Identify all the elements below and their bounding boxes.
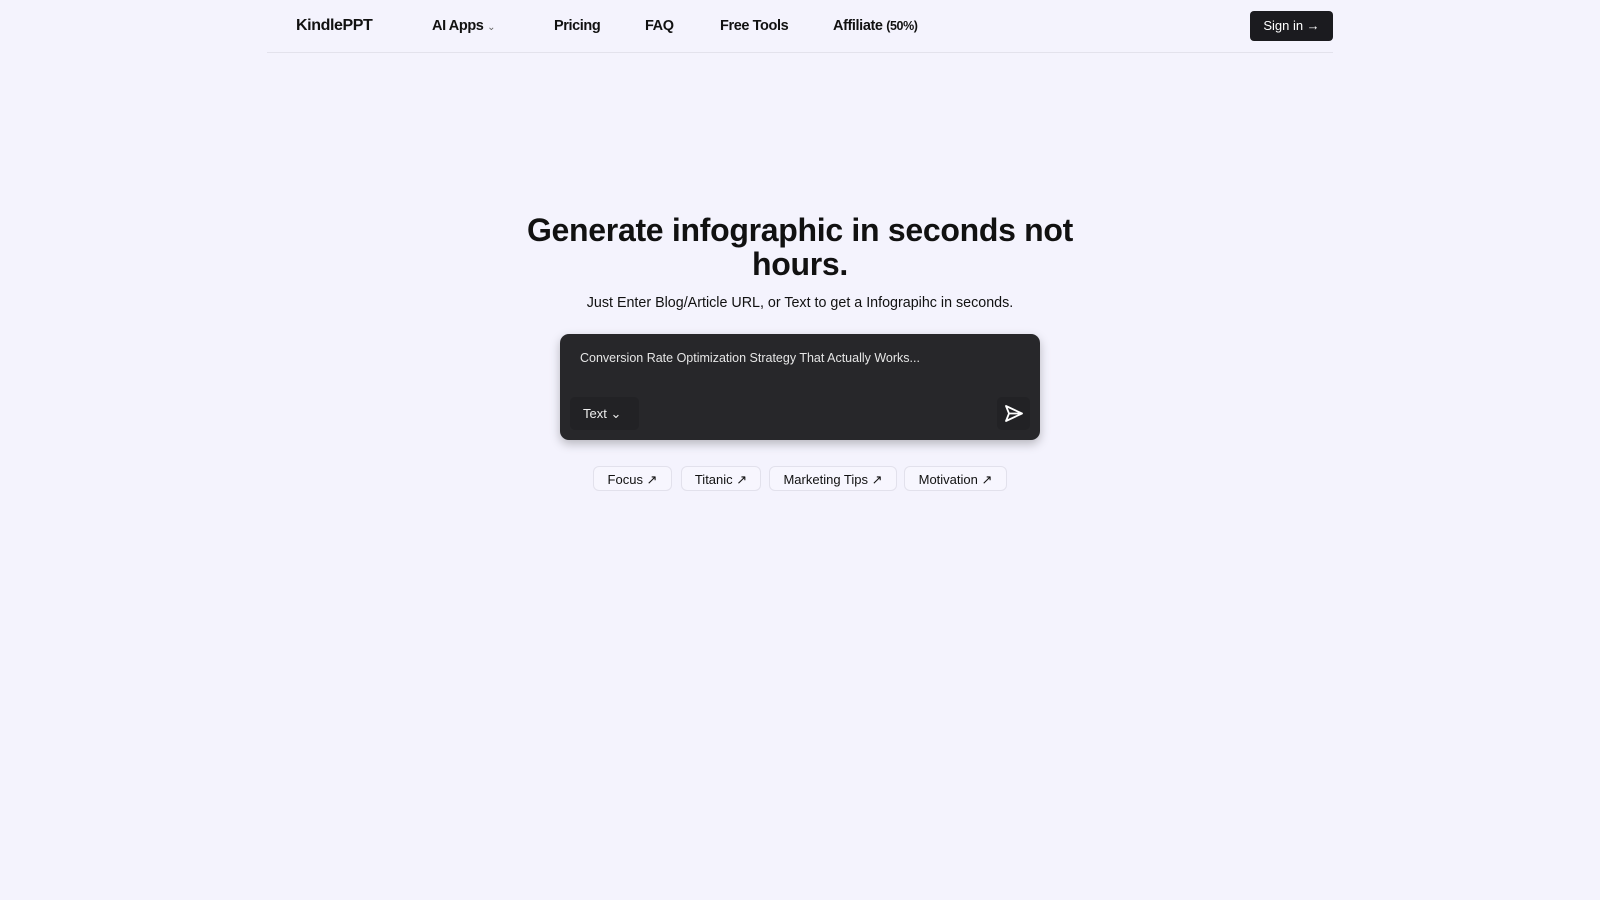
nav: Pricing: Pricing: [554, 18, 600, 34]
chip: Titanic: Titanic ↗: [695, 472, 747, 487]
chip: Marketing Tips: [769, 466, 897, 491]
logo: KindlePPT: [296, 17, 372, 34]
icon: send: [997, 397, 1030, 430]
sign in button: [1250, 11, 1333, 41]
nav: FAQ: FAQ: [645, 18, 674, 34]
nav: AI Apps: AI Apps ⌄: [432, 18, 495, 34]
chip: Motivation: Motivation ↗: [919, 472, 992, 487]
sign in button: Sign in →: [1263, 18, 1320, 33]
title: hours.: [752, 246, 848, 282]
title: [527, 212, 1073, 282]
chip: Titanic: [681, 466, 761, 491]
subtitle: Just Enter Blog/Article URL, or Text to get a Infograpihc in seconds.: [587, 295, 1013, 311]
title: Generate infographic in seconds not: [527, 212, 1073, 248]
nav bar: [296, 11, 1333, 41]
chip: Motivation: [904, 466, 1007, 491]
input text: Conversion Rate Optimization Strategy That Actually Works...: [580, 351, 920, 365]
chip: Focus: [593, 466, 672, 491]
text type dropdown: Text ⌄: [583, 406, 621, 421]
nav: Affiliate: Affiliate (50%): [833, 18, 918, 34]
text type dropdown: [570, 397, 639, 430]
input box: [560, 334, 1040, 440]
chip: Marketing Tips: Marketing Tips ↗: [783, 472, 883, 487]
nav: Free Tools: Free Tools: [720, 18, 788, 34]
chip: Focus: Focus ↗: [608, 472, 657, 487]
